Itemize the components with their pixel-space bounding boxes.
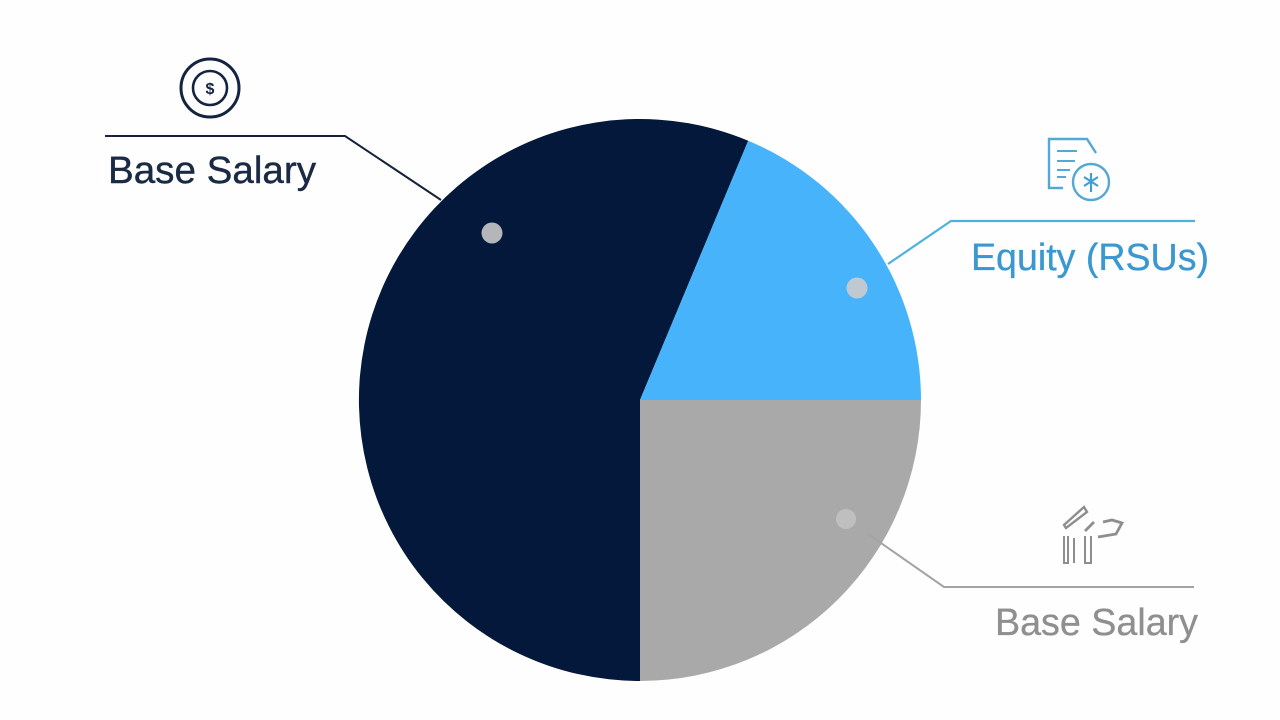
pie chart: [359, 119, 921, 681]
marker dot: navy slice: [482, 222, 502, 244]
callout: equity: [888, 139, 1209, 279]
leader line: base salary: [105, 136, 441, 200]
slice: base salary (grey): [640, 400, 921, 681]
leader line: equity: [888, 221, 1195, 264]
label: equity: Equity (RSUs): [971, 237, 1209, 279]
icon: document with coin: [1049, 139, 1109, 200]
leader line: grey slice: [868, 534, 1194, 587]
callout: base salary top left: [105, 59, 441, 200]
icon: handshake: [1064, 507, 1122, 563]
icon: dollar coin: $: [206, 81, 215, 98]
slice: base salary (navy): [359, 119, 748, 681]
marker dot: blue slice: [846, 278, 868, 298]
label: base salary grey: Base Salary: [995, 602, 1198, 644]
marker dot: grey slice: [836, 509, 856, 529]
slice: equity (blue): [640, 141, 921, 400]
callout: base salary bottom right: [868, 507, 1198, 644]
icon: dollar coin: [181, 59, 239, 117]
label: base salary: Base Salary: [108, 150, 316, 192]
